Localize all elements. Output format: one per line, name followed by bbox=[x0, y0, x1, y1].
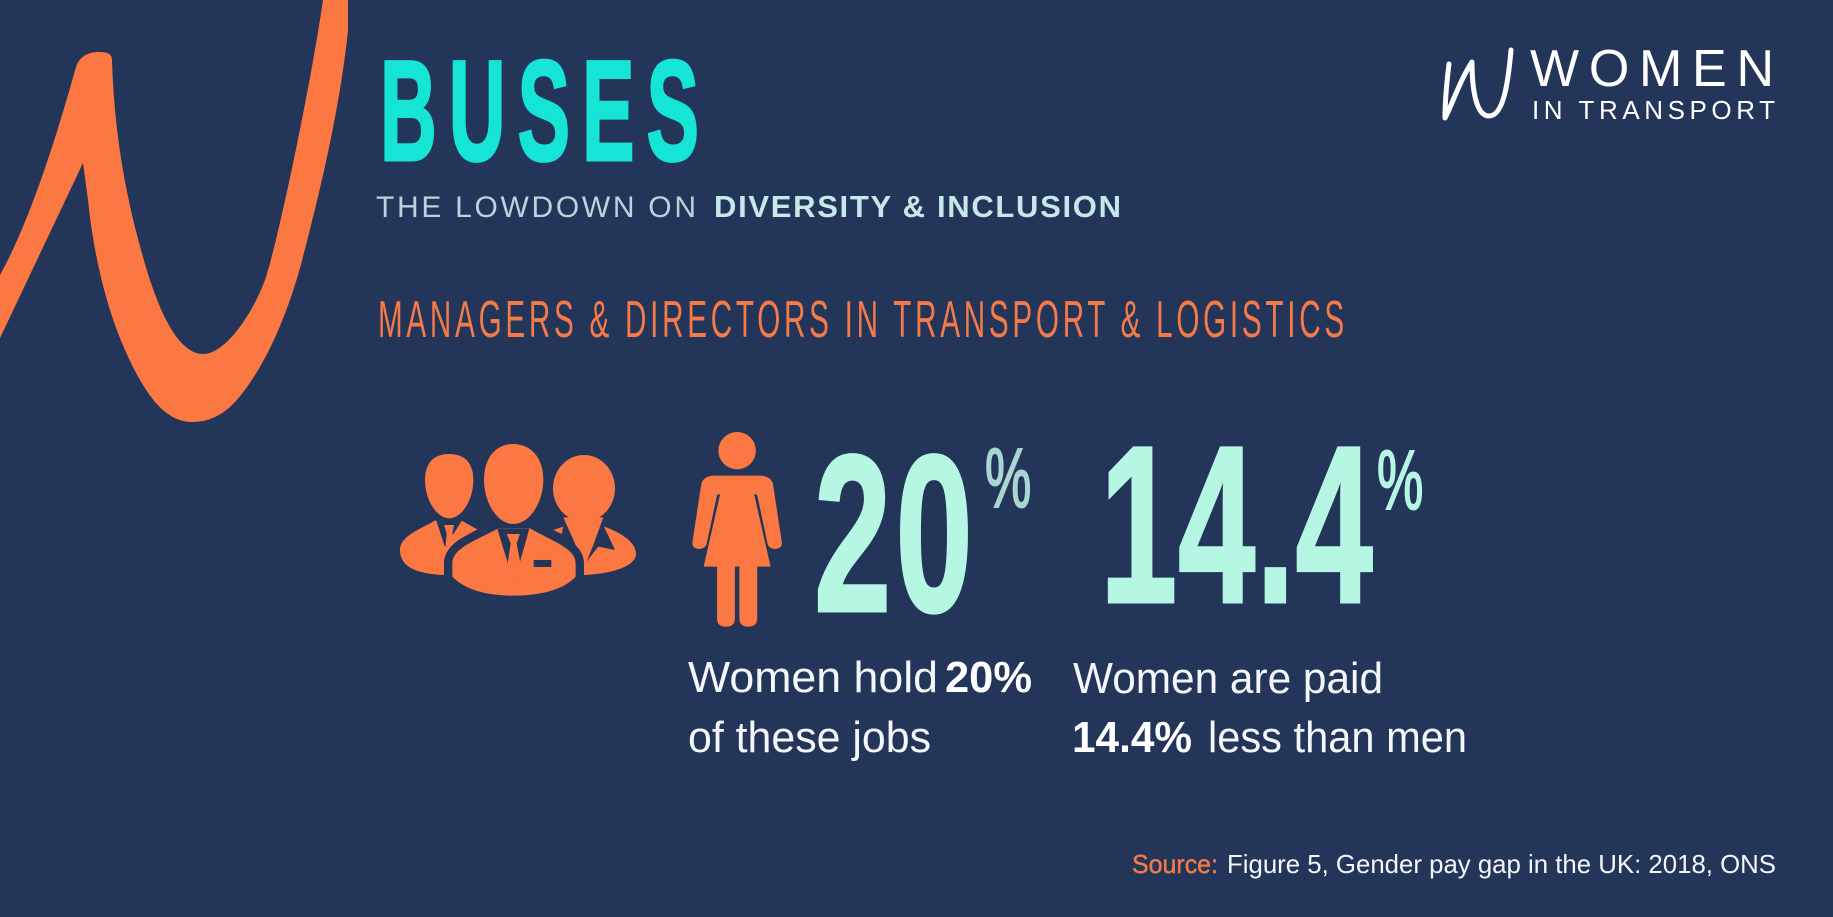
caption line 1: Women hold bbox=[688, 653, 938, 702]
caption line 1: 20% bbox=[945, 653, 1032, 702]
caption line 2: 14.4% bbox=[1072, 713, 1192, 762]
big number 14.4: 14.4 bbox=[1100, 400, 1373, 650]
right person bbox=[553, 455, 636, 575]
source label: Source: bbox=[1132, 849, 1218, 879]
logo script W bbox=[1445, 50, 1511, 118]
caption line 2: less than men bbox=[1208, 713, 1467, 762]
section heading: MANAGERS & DIRECTORS IN TRANSPORT & LOGISTICS bbox=[378, 290, 1344, 348]
logo words IN TRANSPORT: IN TRANSPORT bbox=[1532, 95, 1775, 125]
logo word WOMEN: WOMEN bbox=[1530, 40, 1774, 98]
centre person bbox=[452, 444, 576, 596]
caption line 2 bbox=[1072, 713, 1467, 762]
stat: 20% bbox=[814, 409, 1031, 659]
icon: woman figure bbox=[692, 432, 782, 627]
caption line 2: of these jobs bbox=[688, 713, 931, 762]
caption: women are paid 14.4% less bbox=[1072, 654, 1467, 762]
caption line 1: Women are paid bbox=[1073, 654, 1383, 703]
logo: Women in Transport bbox=[1445, 40, 1775, 125]
subtitle bold part: DIVERSITY & INCLUSION bbox=[714, 189, 1121, 224]
source note bbox=[1132, 849, 1776, 879]
stat: 14.4% bbox=[1100, 400, 1423, 650]
title: BUSES: BUSES bbox=[380, 32, 699, 191]
big number 20: 20 bbox=[814, 409, 973, 659]
subtitle bbox=[376, 189, 1121, 224]
percent sign: % bbox=[1377, 433, 1423, 527]
left person bbox=[400, 454, 478, 575]
caption: women hold 20% bbox=[688, 653, 1032, 762]
source text: Figure 5, Gender pay gap in the UK: 2018, ONS bbox=[1227, 849, 1776, 879]
icon: managers group bbox=[400, 444, 636, 596]
subtitle light part: THE LOWDOWN ON bbox=[376, 191, 696, 224]
decorative orange W swoosh bbox=[0, 0, 348, 422]
percent sign: % bbox=[985, 431, 1031, 525]
